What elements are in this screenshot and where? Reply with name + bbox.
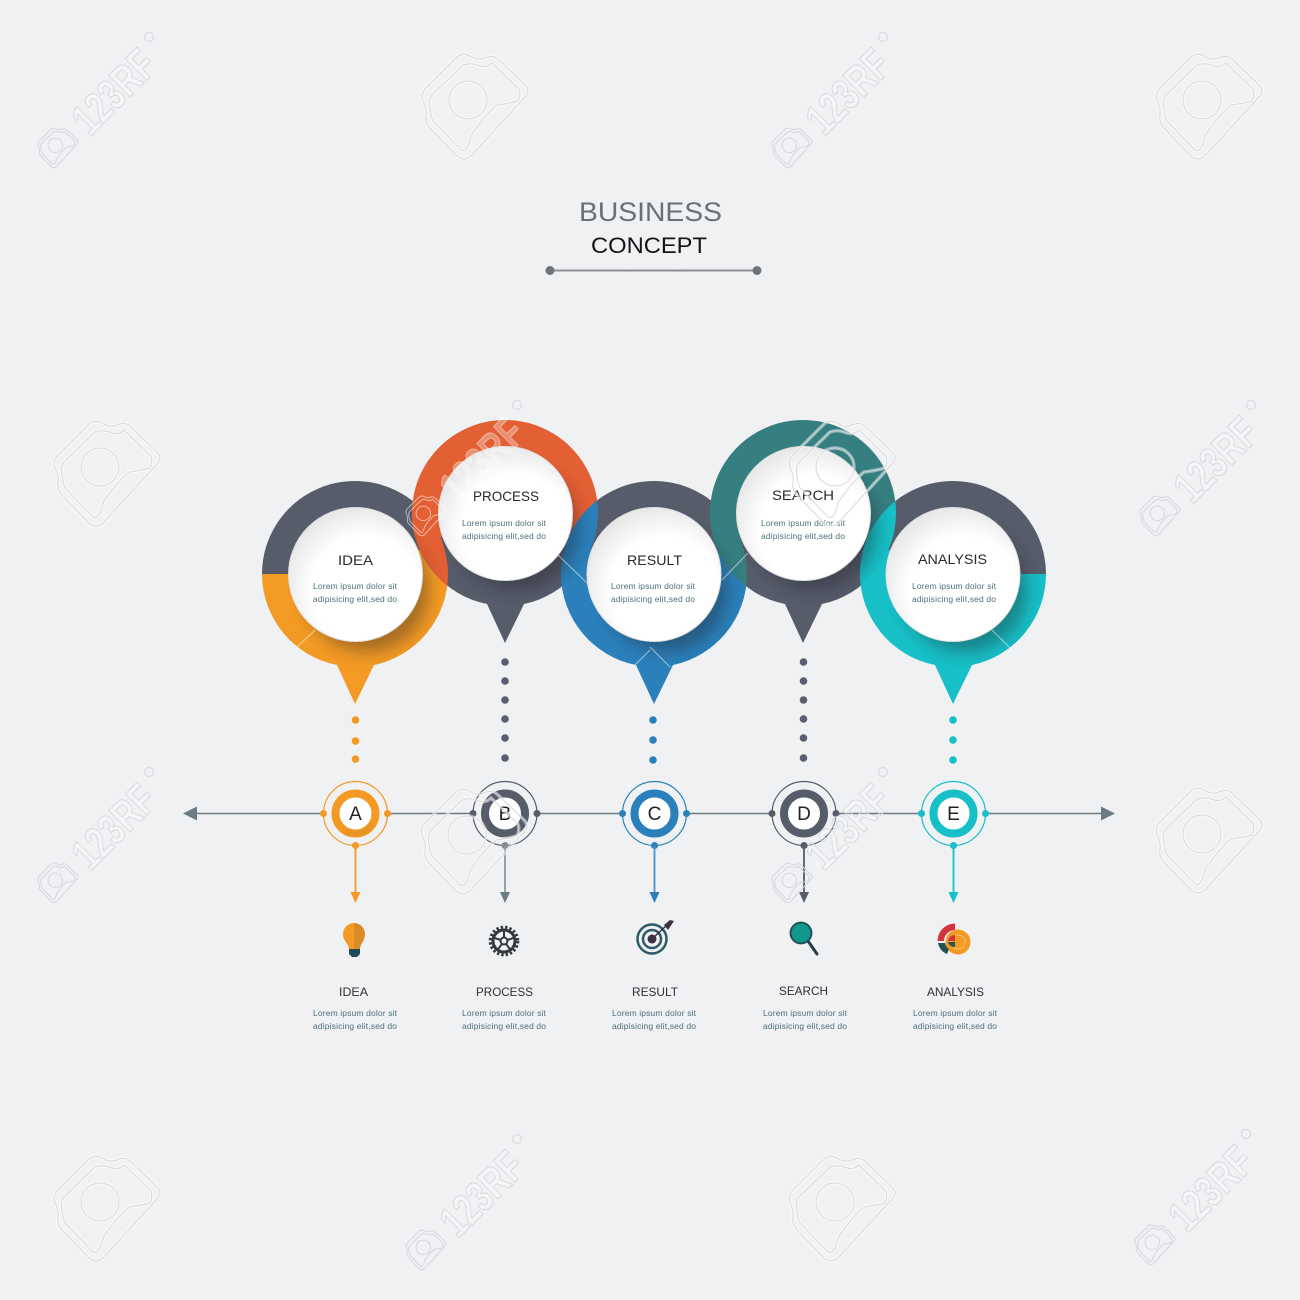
title: CONCEPT [591, 233, 707, 258]
card: analysis [886, 508, 1020, 642]
card: idea [288, 508, 422, 642]
card: result: Lorem ipsum dolor sit [611, 581, 696, 591]
card: search: Lorem ipsum dolor sit [761, 518, 846, 528]
caption: analysis: adipisicing elit,sed do [913, 1021, 997, 1031]
title: BUSINESS [579, 197, 722, 227]
timeline axis with arrows [183, 806, 1115, 820]
ring shadows [305, 467, 1027, 652]
caption: analysis: ANALYSIS [927, 985, 984, 999]
card: result [587, 508, 721, 642]
caption: process: Lorem ipsum dolor sit [462, 1008, 547, 1018]
card: idea: Lorem ipsum dolor sit [313, 581, 398, 591]
highlight lines on pins [297, 553, 1010, 667]
watermark logo right: 123RF [1164, 408, 1268, 512]
card: process [438, 446, 572, 580]
watermark logo bottom right [1135, 1130, 1263, 1265]
pin shapes [262, 420, 1046, 704]
node C: C [648, 804, 661, 825]
card: search [736, 446, 870, 580]
caption: idea: adipisicing elit,sed do [313, 1021, 397, 1031]
caption: idea: Lorem ipsum dolor sit [313, 1008, 398, 1018]
caption: process: PROCESS [476, 985, 533, 999]
card: result: RESULT [627, 552, 682, 568]
caption: analysis: Lorem ipsum dolor sit [913, 1008, 998, 1018]
watermark logo over process pin [406, 400, 534, 536]
watermark logo bottom centre: 123RF [430, 1142, 534, 1246]
watermark logo top left [38, 32, 166, 168]
watermark logo top centre [772, 32, 900, 168]
node B: B [499, 804, 511, 825]
node A [320, 782, 391, 903]
card: process: Lorem ipsum dolor sit [462, 518, 547, 528]
node A: A [349, 804, 362, 825]
watermark logo left: 123RF [62, 775, 166, 879]
card: process: PROCESS [473, 488, 539, 504]
watermark logo top left: 123RF [62, 40, 166, 144]
caption: result: adipisicing elit,sed do [612, 1021, 696, 1031]
pin: process [410, 420, 601, 643]
pin: search [708, 420, 899, 643]
icon: target [638, 920, 674, 954]
card: analysis: Lorem ipsum dolor sit [912, 581, 997, 591]
node D [768, 782, 840, 903]
node D: D [797, 804, 811, 825]
watermark logo lower centre [772, 768, 900, 903]
card: search: SEARCH [772, 487, 834, 503]
card: process: adipisicing elit,sed do [462, 531, 546, 541]
watermark logo bottom right: 123RF [1159, 1137, 1263, 1241]
caption: analysis [913, 985, 998, 1031]
caption: result [612, 985, 697, 1031]
background diagonal lines [175, 175, 1125, 1125]
ring overlaps [412, 500, 896, 587]
caption: search [763, 984, 848, 1031]
node C [619, 782, 690, 903]
card: analysis: ANALYSIS [918, 551, 987, 567]
node E [918, 782, 989, 903]
title [546, 197, 762, 275]
card: analysis: adipisicing elit,sed do [912, 594, 996, 604]
watermark logo over process pin: 123RF [430, 408, 534, 512]
caption: process [462, 985, 547, 1031]
watermark logo bottom centre [406, 1134, 534, 1270]
caption: result: Lorem ipsum dolor sit [612, 1008, 697, 1018]
node B [470, 782, 540, 903]
pin: result [558, 481, 750, 704]
pin: analysis [857, 481, 1046, 704]
pin: idea [262, 481, 455, 704]
caption: idea [313, 985, 398, 1031]
caption: search: Lorem ipsum dolor sit [763, 1008, 848, 1018]
caption: result: RESULT [632, 985, 679, 999]
watermark logo left [38, 768, 166, 903]
caption: process: adipisicing elit,sed do [462, 1021, 546, 1031]
icon: magnifier [790, 922, 817, 954]
watermark logo right [1140, 400, 1268, 536]
node E: E [947, 804, 960, 825]
watermark logo lower centre: 123RF [796, 775, 900, 879]
icon: analysis chart [938, 924, 970, 954]
card: idea: adipisicing elit,sed do [313, 594, 397, 604]
caption: search: adipisicing elit,sed do [763, 1021, 847, 1031]
icon: light bulb [343, 923, 365, 957]
dotted connectors [352, 658, 957, 764]
watermark logo top centre: 123RF [796, 40, 900, 144]
card: search: adipisicing elit,sed do [761, 531, 845, 541]
card: idea: IDEA [338, 552, 374, 568]
icon: gear [490, 927, 518, 955]
caption: search: SEARCH [779, 984, 828, 998]
card: result: adipisicing elit,sed do [611, 594, 695, 604]
caption: idea: IDEA [339, 985, 368, 999]
